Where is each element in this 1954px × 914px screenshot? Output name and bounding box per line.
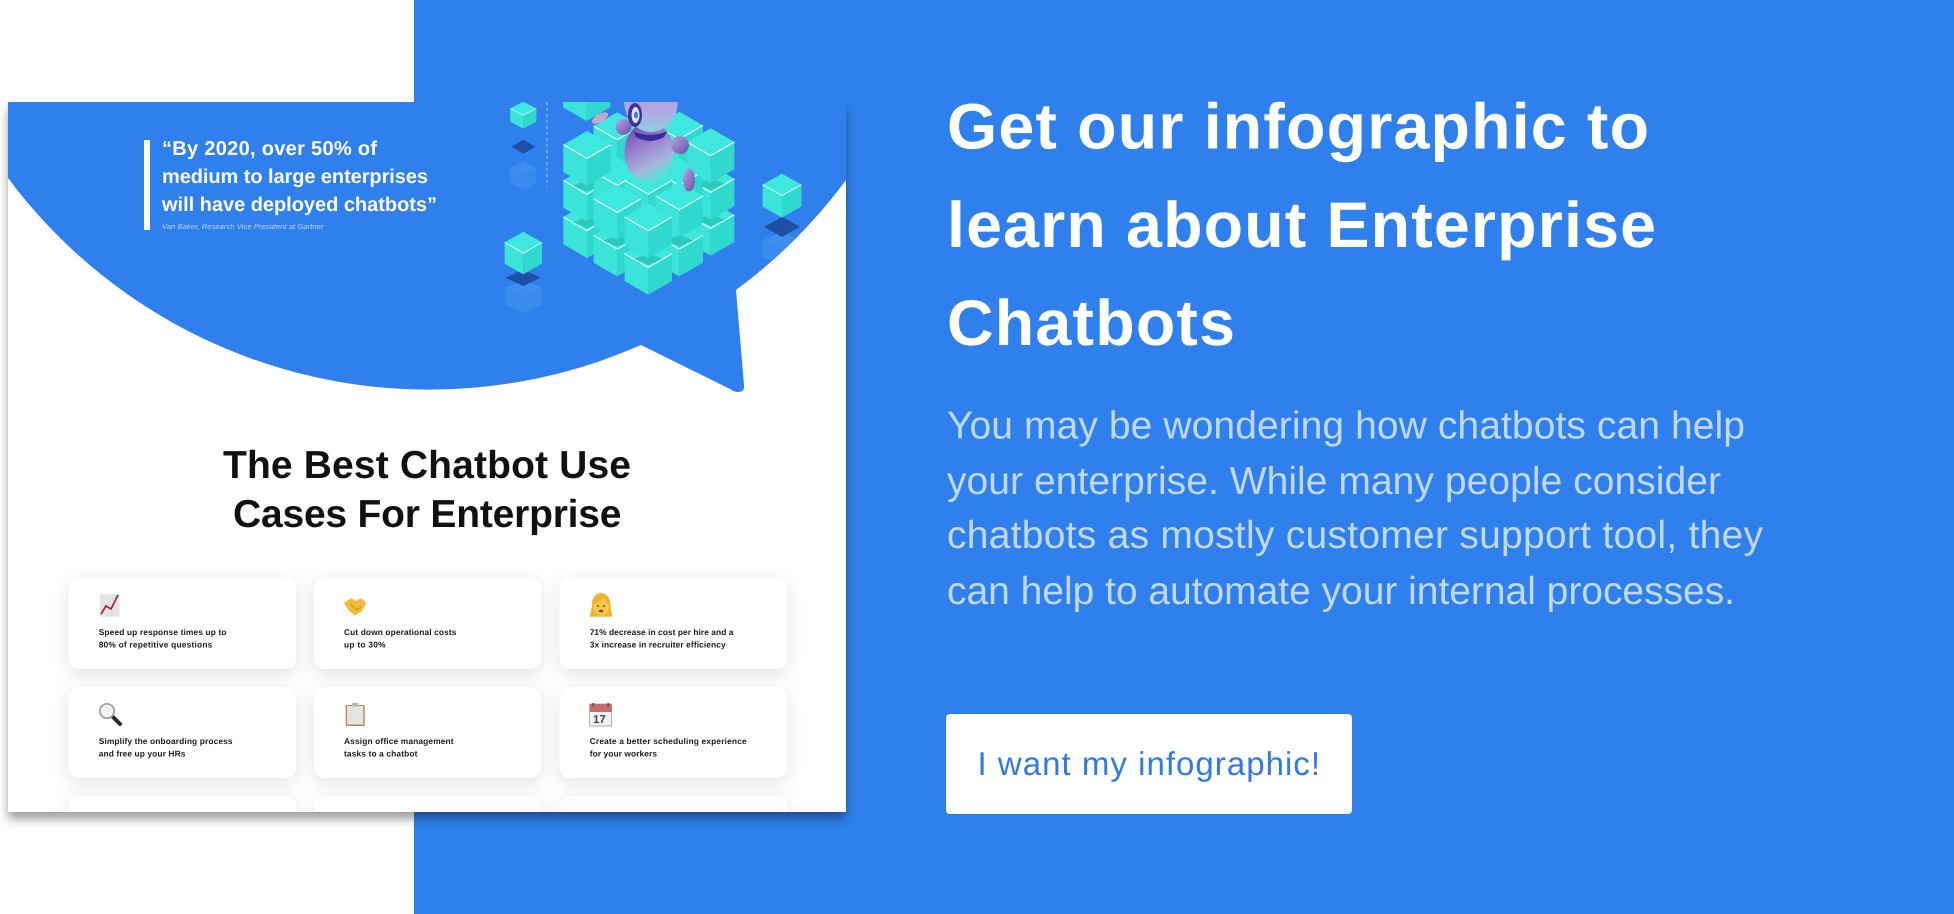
body text: can help to automate your internal processes. bbox=[947, 570, 1735, 613]
heading bbox=[947, 91, 1656, 359]
icon: magnifier bbox=[100, 704, 120, 724]
card: scheduling: for your workers bbox=[590, 749, 657, 759]
card: scheduling: Create a better scheduling experience bbox=[590, 736, 747, 746]
heading: learn about Enterprise bbox=[947, 189, 1656, 261]
card: recruiting bbox=[560, 577, 787, 669]
cube stack bbox=[563, 112, 734, 295]
small cube right bbox=[763, 174, 801, 265]
quote text: “By 2020, over 50% of bbox=[162, 138, 377, 160]
quote text bbox=[161, 138, 437, 216]
icon: woman bbox=[590, 593, 613, 617]
card: operational costs: up to 30% bbox=[344, 640, 386, 650]
body text: chatbots as mostly customer support tool, they bbox=[947, 514, 1764, 557]
icon: clipboard bbox=[346, 703, 365, 726]
card: response times: 80% of repetitive questions bbox=[99, 640, 213, 650]
quote text: medium to large enterprises bbox=[162, 166, 428, 188]
heading: Get our infographic to bbox=[947, 91, 1649, 163]
card: recruiting: 3x increase in recruiter efficiency bbox=[590, 640, 726, 650]
quote bar bbox=[144, 140, 150, 230]
card: response times: Speed up response times up to bbox=[99, 627, 226, 637]
button bbox=[946, 714, 1352, 814]
card: office management bbox=[314, 687, 541, 778]
card: recruiting: 71% decrease in cost per hire and a bbox=[590, 627, 734, 637]
speech bubble header bbox=[8, 102, 846, 392]
icon: calendar: 17 bbox=[593, 714, 606, 726]
card: onboarding bbox=[68, 687, 296, 778]
body text: You may be wondering how chatbots can help bbox=[947, 404, 1745, 447]
cube top partial bbox=[563, 102, 610, 121]
panel title: Cases For Enterprise bbox=[233, 493, 622, 536]
dashed line bbox=[546, 102, 548, 187]
card: office management: Assign office management bbox=[344, 736, 454, 746]
small cube lower left bbox=[505, 232, 542, 313]
small cube top left bbox=[510, 102, 536, 190]
card: onboarding: Simplify the onboarding process bbox=[99, 736, 233, 746]
card: onboarding: and free up your HRs bbox=[99, 749, 186, 759]
body text bbox=[947, 404, 1764, 613]
icon: calendar bbox=[590, 703, 612, 726]
use case cards bbox=[64, 587, 792, 812]
robot bbox=[592, 102, 695, 192]
body text: your enterprise. While many people consider bbox=[947, 460, 1721, 503]
card: scheduling bbox=[560, 687, 787, 778]
button: I want my infographic! bbox=[978, 745, 1320, 782]
quote attribution: Van Baker, Research Vice President at Gartner bbox=[162, 222, 324, 231]
panel: infographic preview bbox=[8, 66, 846, 856]
cards row three, cropped bbox=[66, 806, 790, 812]
illustration: robot on cubes bbox=[504, 102, 802, 312]
card: operational costs bbox=[314, 577, 541, 669]
card: office management: tasks to a chatbot bbox=[344, 749, 418, 759]
card: response times bbox=[68, 577, 296, 669]
icon: chart bbox=[100, 594, 120, 617]
card: operational costs: Cut down operational costs bbox=[344, 627, 457, 637]
blue background bbox=[414, 0, 1954, 914]
heading: Chatbots bbox=[947, 287, 1235, 359]
panel title bbox=[223, 444, 631, 536]
quote text: will have deployed chatbots” bbox=[161, 194, 437, 216]
icon: handshake bbox=[344, 598, 366, 616]
panel title: The Best Chatbot Use bbox=[223, 444, 631, 487]
